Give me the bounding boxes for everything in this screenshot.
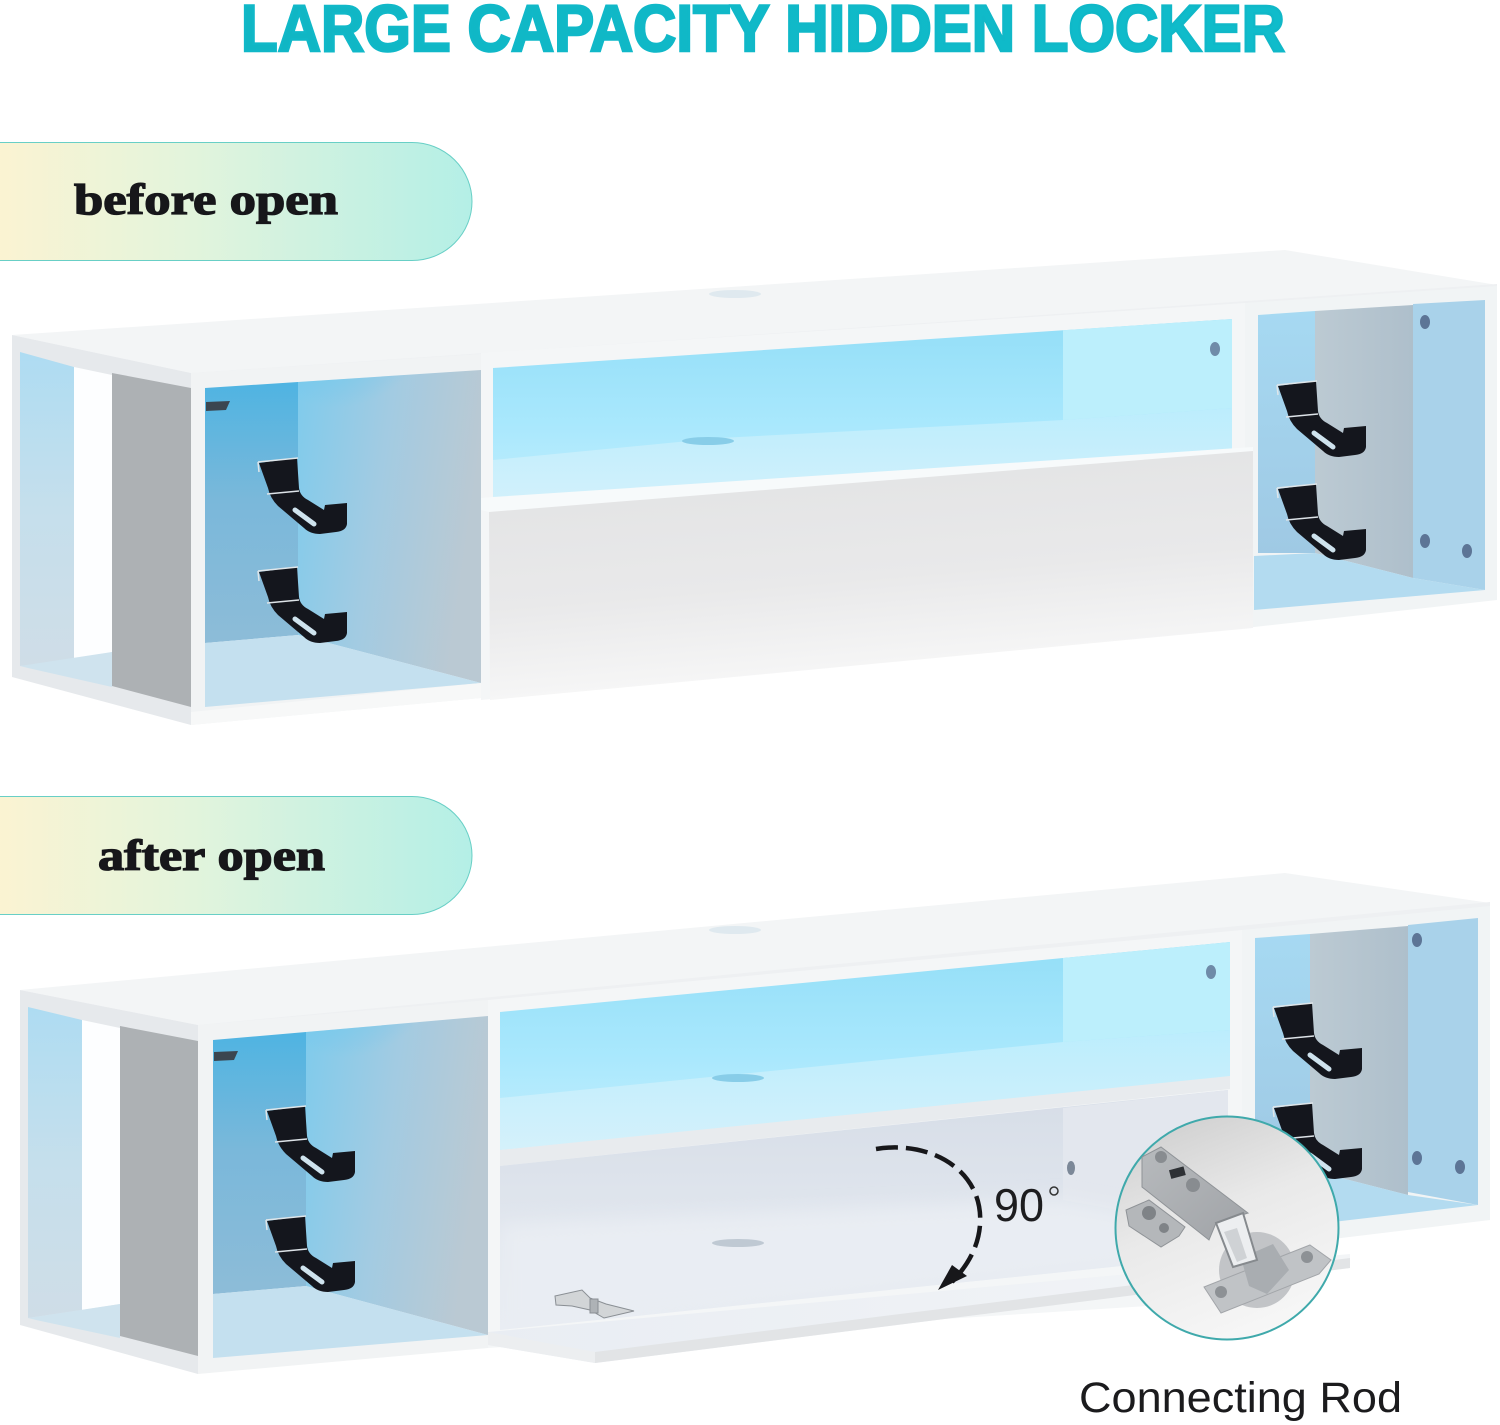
cabinet top surface (20, 873, 1490, 1040)
product: cabinet with door open (20, 873, 1490, 1422)
right module floor (1248, 1170, 1478, 1232)
wall screw (1210, 342, 1220, 356)
rotation arrow (876, 1147, 980, 1290)
left front face (198, 1000, 488, 1374)
plate screw (1159, 1223, 1169, 1233)
cup center (1241, 1244, 1289, 1294)
right module outer panel (1408, 918, 1478, 1205)
left module top glow (309, 376, 385, 390)
left module small bracket (214, 1051, 238, 1061)
shiny link (1216, 1213, 1257, 1267)
left edge of flap (488, 1332, 595, 1363)
mounting plate (1126, 1200, 1185, 1247)
open door flap (488, 1254, 1350, 1363)
right module gray wall (1310, 926, 1408, 1195)
plate screw (1215, 1286, 1227, 1298)
hinge arm plate (1142, 1147, 1248, 1240)
lower cable hole (712, 1239, 764, 1247)
left side gray panel (112, 373, 191, 707)
center and right front band (191, 284, 1497, 388)
arm screw (1155, 1151, 1167, 1163)
hook (258, 567, 347, 643)
cable hole (712, 1074, 764, 1082)
left module back wall (205, 382, 298, 643)
caption: Connecting Rod: Connecting Rod (1079, 1374, 1402, 1422)
plate screw (1142, 1206, 1156, 1220)
open door front edge (595, 1258, 1350, 1363)
left side frame (12, 335, 191, 725)
right module outer panel (1413, 300, 1485, 590)
center glass back (493, 319, 1232, 512)
hook (266, 1216, 355, 1292)
screws (1412, 933, 1465, 1174)
wall screw (1206, 965, 1216, 979)
left front face (191, 354, 481, 725)
hook (258, 458, 347, 534)
label pill: before open: before open (74, 177, 338, 224)
link shine (1224, 1228, 1247, 1262)
hook (266, 1106, 355, 1182)
door (489, 449, 1253, 700)
hook (1277, 484, 1366, 560)
hook (1273, 1103, 1362, 1179)
left side frame (20, 990, 198, 1374)
left module top glow (314, 1024, 398, 1040)
left side white gap (74, 367, 112, 660)
center glass soft lights (500, 942, 1230, 1150)
small hinge on door (555, 1290, 634, 1318)
left side gray panel (120, 1026, 198, 1356)
screws (1420, 315, 1472, 558)
center glass soft lights (493, 319, 1232, 512)
left side glow panel (28, 1007, 82, 1318)
label pill: after open: after open (98, 833, 325, 880)
left module back wall (213, 1032, 306, 1294)
lower compartment right wall (1063, 1090, 1228, 1230)
center right lighter area (1063, 942, 1230, 1042)
left side white gap (82, 1020, 120, 1310)
left side floor (28, 1304, 120, 1338)
right module floor (1254, 553, 1485, 610)
plate screw (1301, 1251, 1313, 1263)
left side floor (20, 652, 112, 687)
center shelf floor (500, 1030, 1230, 1150)
hinge cup (1219, 1232, 1295, 1308)
left module side wall (298, 370, 481, 683)
arm slot (1169, 1166, 1186, 1179)
label pill: before open (0, 142, 472, 260)
left module side wall (306, 1016, 488, 1335)
right module blue panel (1255, 934, 1310, 1170)
degree symbol (1050, 1187, 1058, 1195)
base plate (1204, 1245, 1331, 1313)
center shelf floor (493, 408, 1232, 497)
left module floor (213, 1286, 488, 1358)
90 degree label: 90 (994, 1179, 1044, 1231)
hook (1277, 381, 1366, 457)
front band (198, 902, 1490, 1041)
top cable hole (709, 290, 761, 298)
left module floor (205, 635, 481, 707)
center front frame (481, 303, 1245, 700)
right module frame (1242, 906, 1490, 1250)
hook (1273, 1003, 1362, 1079)
right module blue panel (1258, 311, 1315, 553)
lower floor (711, 1208, 1114, 1228)
right module gray wall (1315, 305, 1413, 578)
shelf edge (500, 1076, 1230, 1166)
lower screw (1067, 1161, 1075, 1175)
left module bottom edge (191, 683, 481, 725)
center right lighter area (1063, 319, 1232, 420)
cable hole (682, 437, 734, 445)
label pill: after open (0, 796, 472, 914)
hinge callout (1116, 1116, 1338, 1340)
product: closed cabinet with door shut (12, 250, 1497, 725)
center front frame (488, 930, 1242, 1348)
left side glow panel (20, 352, 74, 666)
arm screw (1186, 1178, 1200, 1192)
cabinet top surface (12, 250, 1497, 387)
right module frame (1245, 286, 1497, 628)
top cable hole (709, 926, 761, 934)
door top edge (481, 447, 1253, 512)
center glass back (500, 942, 1230, 1150)
lower compartment (500, 1090, 1228, 1330)
left module small bracket (206, 401, 230, 411)
